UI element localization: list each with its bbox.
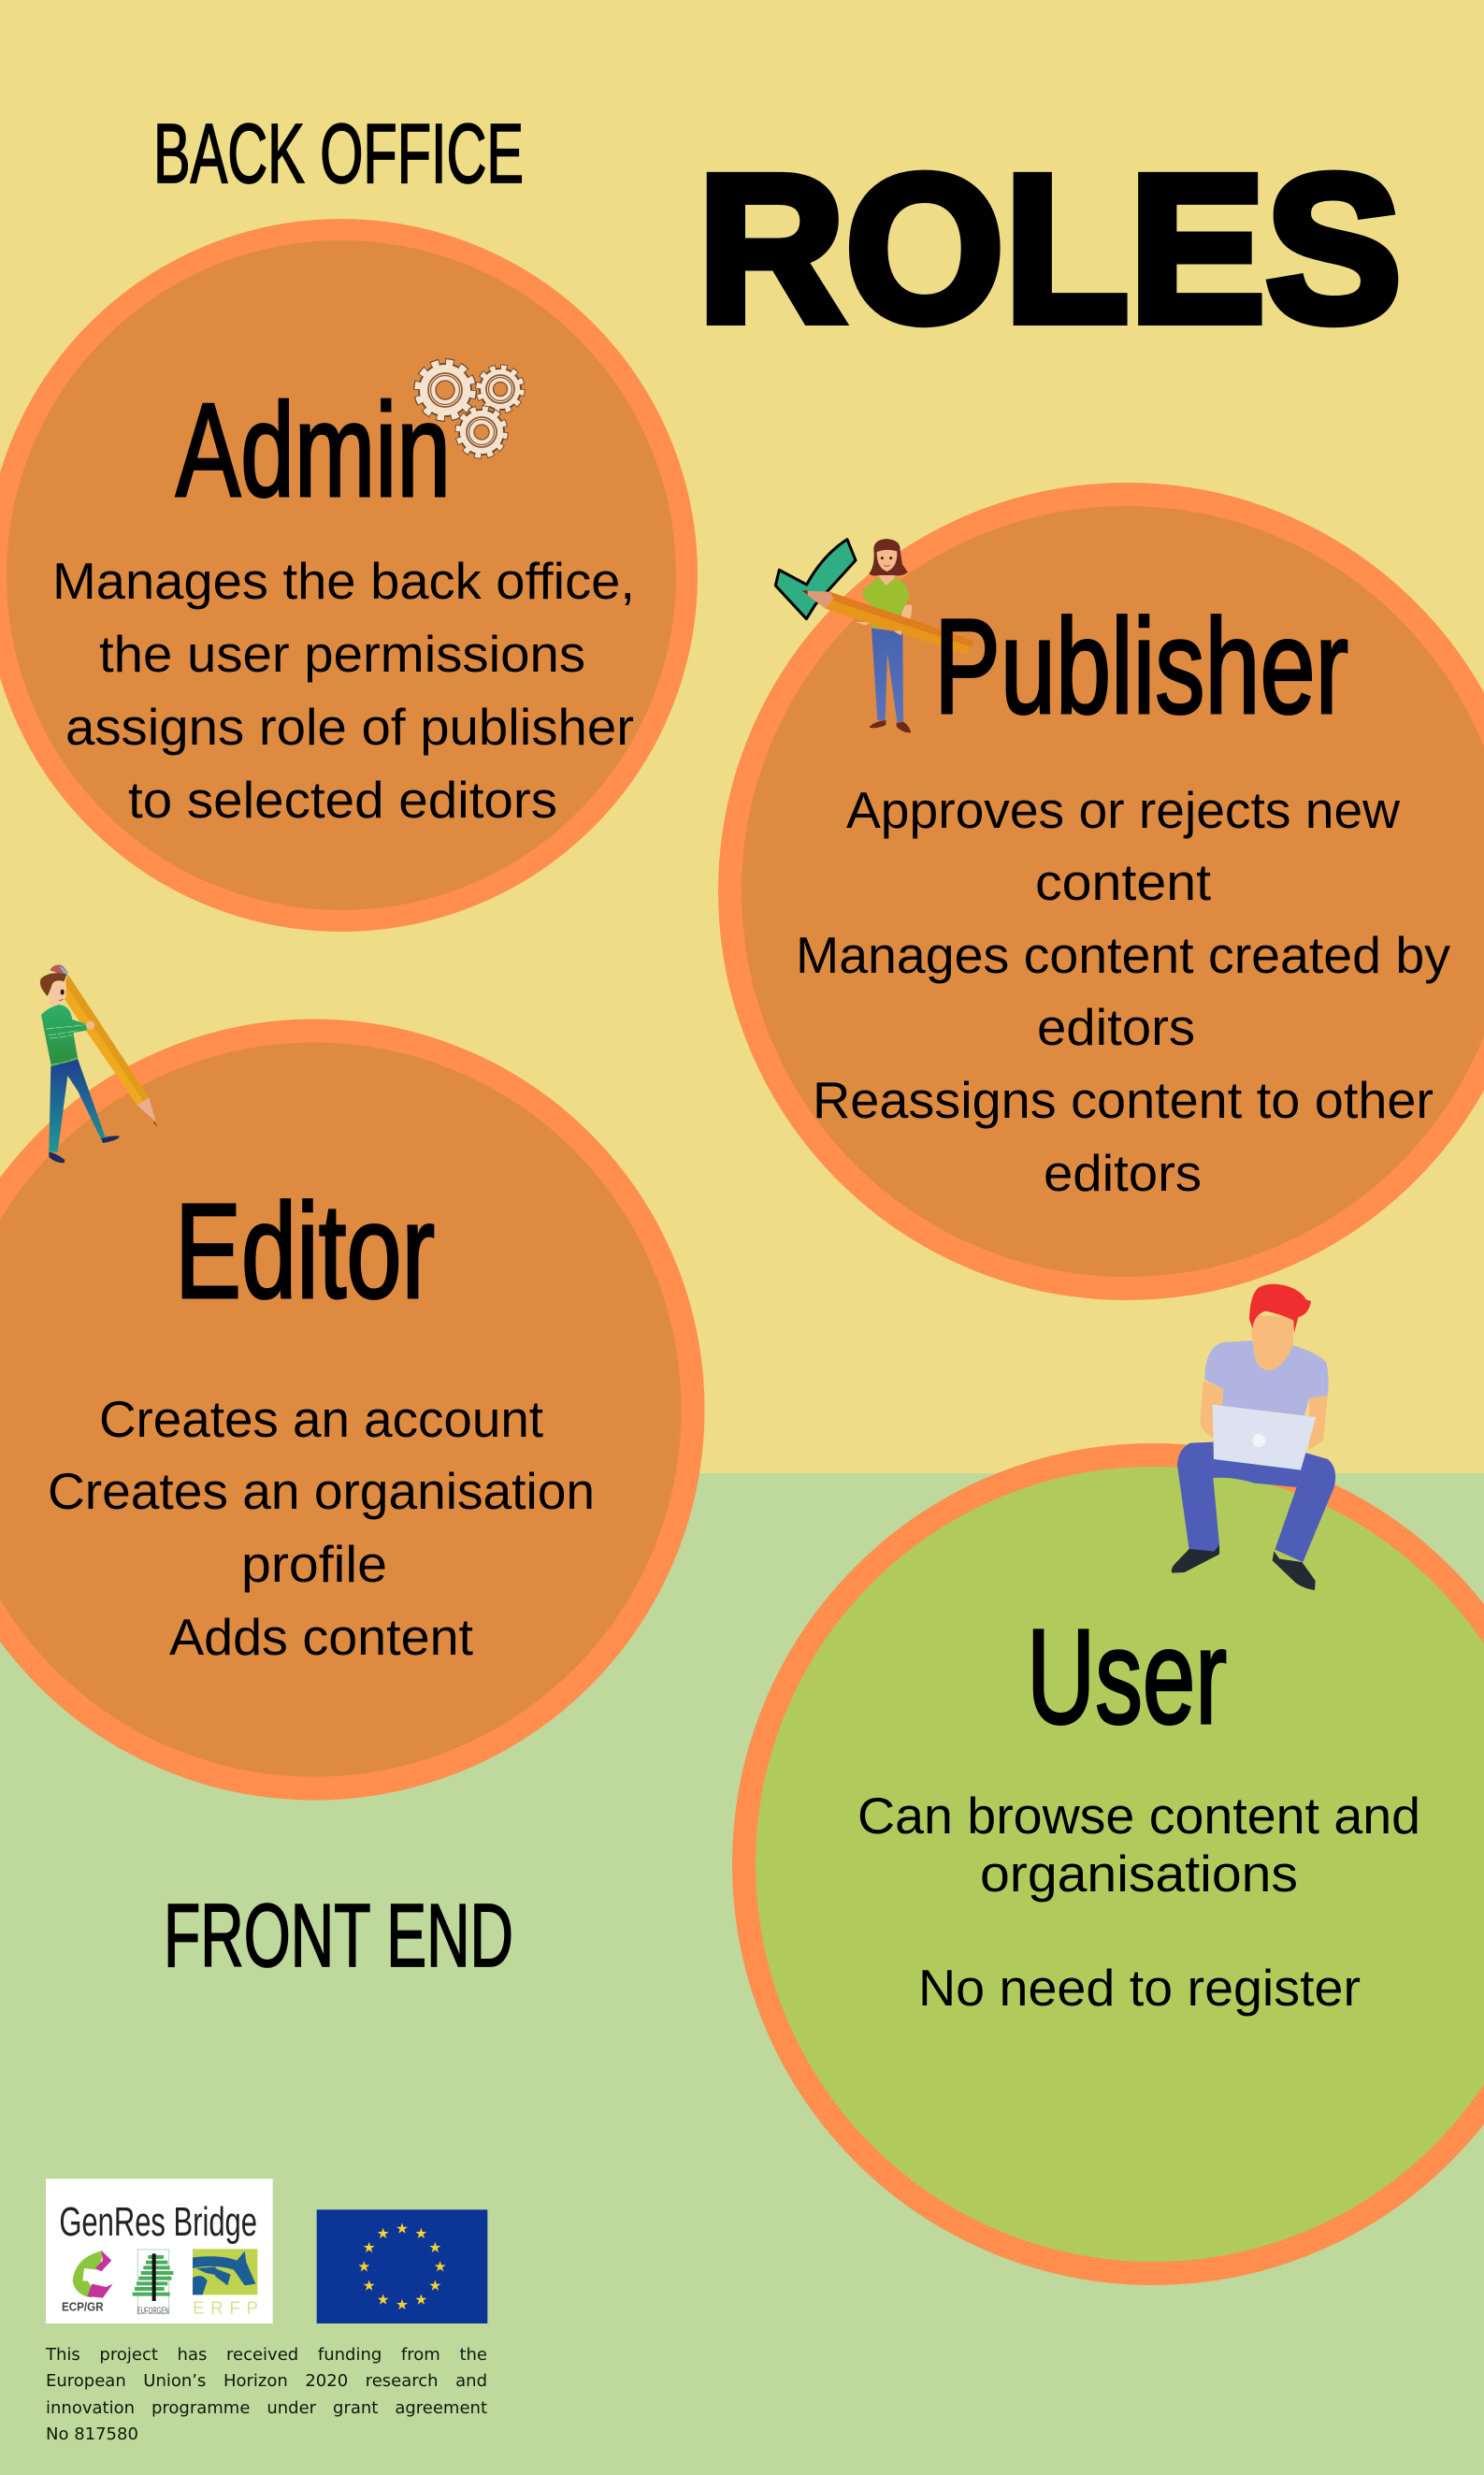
editor heading: Editor xyxy=(175,1176,435,1326)
publisher description xyxy=(796,781,1450,1202)
icon: checkmark and woman with pencil xyxy=(775,539,974,732)
publisher description: content xyxy=(1035,853,1211,911)
icon: man with pencil xyxy=(40,964,158,1163)
admin description: to selected editors xyxy=(128,771,557,829)
admin description: the user permissions xyxy=(99,625,585,683)
publisher description: Manages content created by xyxy=(796,926,1450,984)
admin description: assigns role of publisher xyxy=(65,698,634,756)
publisher description: Approves or rejects new xyxy=(846,781,1400,839)
title: roles: ROLES xyxy=(698,132,1402,366)
admin circle xyxy=(0,230,686,920)
heading: front end: FRONT END xyxy=(164,1886,513,1986)
editor description: profile xyxy=(241,1535,387,1593)
admin heading: Admin xyxy=(176,376,451,525)
heading: back office: BACK OFFICE xyxy=(153,108,524,201)
user description: No need to register xyxy=(918,1959,1361,2017)
publisher description: editors xyxy=(1044,1144,1202,1202)
editor description: Adds content xyxy=(169,1608,473,1666)
logo: GenRes Bridge partners xyxy=(46,2178,273,2323)
editor description xyxy=(48,1390,595,1666)
background: green front end area xyxy=(0,1473,1484,2475)
user heading: User xyxy=(1027,1601,1227,1752)
publisher description: editors xyxy=(1037,998,1195,1056)
panel: admin xyxy=(0,230,686,920)
panel: editor xyxy=(0,964,693,1788)
logo: EU flag xyxy=(317,2209,487,2323)
admin description: Manages the back office, xyxy=(52,552,635,610)
logo: GenRes Bridge partners: EUFORGEN xyxy=(137,2306,169,2316)
funding statement: European Union’s Horizon 2020 research and xyxy=(46,2371,487,2391)
panel: publisher xyxy=(729,494,1484,1289)
publisher circle xyxy=(729,494,1484,1289)
logo: GenRes Bridge partners: ERFP xyxy=(193,2297,258,2317)
user circle xyxy=(744,1455,1484,2273)
logo: GenRes Bridge partners: ECP/GR xyxy=(62,2301,104,2314)
logo: GenRes Bridge partners: GenRes Bridge xyxy=(59,2199,257,2245)
publisher heading: Publisher xyxy=(934,591,1348,742)
panel: user xyxy=(744,1284,1484,2273)
funding statement: This project has received funding from the xyxy=(46,2345,487,2365)
admin description xyxy=(52,552,635,829)
funding statement: innovation programme under grant agreement xyxy=(46,2398,487,2418)
funding statement: No 817580 xyxy=(46,2424,138,2444)
publisher description: Reassigns content to other xyxy=(813,1071,1434,1129)
editor circle xyxy=(0,1031,693,1788)
user description: organisations xyxy=(980,1845,1298,1903)
funding statement xyxy=(45,2345,487,2444)
icon: gears xyxy=(417,363,522,456)
icon: man with laptop xyxy=(1172,1284,1335,1590)
editor description: Creates an account xyxy=(99,1390,543,1448)
user description xyxy=(857,1787,1420,2017)
editor description: Creates an organisation xyxy=(48,1462,595,1520)
background: yellow back office area xyxy=(0,0,1484,1473)
user description: Can browse content and xyxy=(857,1787,1420,1845)
